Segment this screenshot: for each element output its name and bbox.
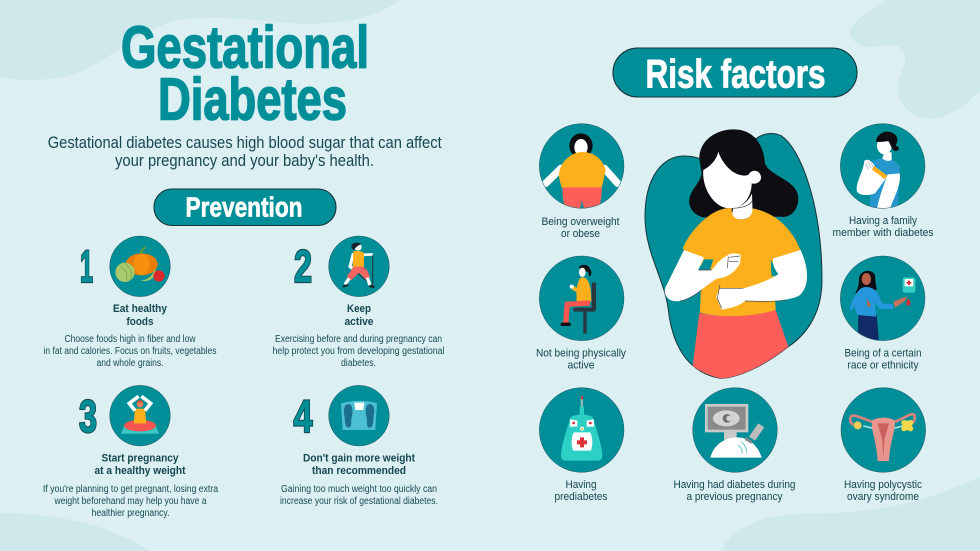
intro text: your pregnancy and your baby's health. bbox=[115, 152, 374, 170]
label: member with diabetes bbox=[832, 227, 934, 239]
heading bbox=[94, 452, 186, 477]
icon: glucose device bbox=[539, 388, 624, 472]
number 3: 3 bbox=[79, 391, 97, 442]
heading: risk factors: Risk factors bbox=[646, 52, 826, 96]
body text: in fat and calories. Focus on fruits, vegetables bbox=[44, 346, 217, 357]
label: Being overweight bbox=[542, 216, 620, 228]
label: Having a family bbox=[849, 215, 917, 227]
heading: Keep bbox=[347, 303, 371, 315]
number 1 bbox=[80, 241, 93, 292]
title bbox=[121, 14, 369, 132]
number 3: 3 bbox=[79, 391, 97, 442]
body text bbox=[43, 484, 218, 519]
body text bbox=[272, 334, 444, 369]
label: prediabetes bbox=[554, 491, 608, 503]
body text: increase your risk of gestational diabetes. bbox=[280, 496, 438, 507]
label: active bbox=[568, 360, 594, 372]
illustration: woman holding her stomach bbox=[645, 129, 822, 378]
body text: Gaining too much weight too quickly can bbox=[281, 484, 437, 495]
number 1: 1 bbox=[80, 241, 93, 292]
number 4: 4 bbox=[294, 391, 312, 442]
number 1: 1 bbox=[80, 241, 93, 292]
body text: help protect you from developing gestational bbox=[272, 346, 444, 357]
icon: weighing scale bbox=[329, 385, 389, 446]
label bbox=[832, 215, 934, 239]
icon: yoga pose bbox=[110, 385, 170, 446]
label bbox=[542, 216, 620, 240]
intro text: Gestational diabetes causes high blood sugar that can affect bbox=[48, 134, 442, 152]
icon: vegetables bbox=[110, 236, 170, 297]
body text: and whole grains. bbox=[96, 358, 164, 369]
icon: overweight woman bbox=[539, 124, 624, 210]
label bbox=[674, 479, 796, 503]
intro text bbox=[48, 134, 442, 170]
label: Having bbox=[566, 479, 596, 491]
panel: eat healthy foods bbox=[44, 236, 217, 369]
title: Diabetes bbox=[158, 66, 347, 132]
risk: prediabetes bbox=[539, 388, 624, 503]
icon: uterus and ovaries bbox=[841, 388, 926, 472]
heading: prevention: Prevention bbox=[186, 192, 302, 222]
risk: previous gestational diabetes bbox=[674, 388, 796, 503]
label: Being of a certain bbox=[844, 348, 922, 360]
body text: healthier pregnancy. bbox=[92, 508, 170, 519]
risk: overweight bbox=[539, 124, 624, 240]
heading bbox=[303, 452, 415, 477]
label: a previous pregnancy bbox=[686, 491, 783, 503]
heading: Eat healthy bbox=[113, 303, 168, 315]
heading: Don't gain more weight bbox=[303, 452, 415, 464]
heading bbox=[344, 303, 374, 328]
panel: start at a healthy weight bbox=[43, 385, 218, 519]
icon: ultrasound bbox=[693, 388, 777, 472]
heading: at a healthy weight bbox=[94, 465, 186, 477]
heading: prevention bbox=[154, 189, 336, 226]
icon: seated woman bbox=[539, 256, 624, 341]
heading bbox=[113, 303, 168, 328]
body text: diabetes. bbox=[341, 358, 376, 369]
heading: foods bbox=[126, 316, 154, 328]
risk: family member with diabetes bbox=[832, 124, 934, 239]
icon: walking woman bbox=[329, 236, 389, 297]
label bbox=[844, 479, 922, 503]
body text: weight beforehand may help you have a bbox=[54, 496, 207, 507]
body text: Exercising before and during pregnancy can bbox=[275, 334, 442, 345]
body text: If you're planning to get pregnant, losing extra bbox=[43, 484, 218, 495]
heading: Start pregnancy bbox=[102, 452, 179, 464]
label: ovary syndrome bbox=[847, 491, 919, 503]
number 4: 4 bbox=[294, 391, 312, 442]
risk: race or ethnicity bbox=[840, 256, 925, 372]
title: Gestational bbox=[121, 14, 369, 80]
number 2: 2 bbox=[294, 241, 312, 292]
panel: don't gain more weight bbox=[280, 385, 438, 507]
icon: woman with bandaged arm bbox=[840, 124, 925, 209]
label: Having had diabetes during bbox=[674, 479, 796, 491]
label: Having polycystic bbox=[844, 479, 922, 491]
body text bbox=[280, 484, 438, 507]
number 2: 2 bbox=[294, 241, 312, 292]
risk: polycystic ovary syndrome bbox=[841, 388, 926, 503]
body text: Choose foods high in fiber and low bbox=[64, 334, 196, 345]
label bbox=[536, 348, 626, 372]
body text bbox=[44, 334, 217, 369]
panel: keep active bbox=[272, 236, 444, 369]
icon: woman with glucose meter bbox=[840, 256, 925, 342]
heading: active bbox=[344, 316, 374, 328]
label: Not being physically bbox=[536, 348, 626, 360]
risk: physically inactive bbox=[536, 256, 626, 372]
label bbox=[554, 479, 608, 503]
label: race or ethnicity bbox=[848, 360, 919, 372]
heading: than recommended bbox=[312, 465, 406, 477]
label: or obese bbox=[561, 228, 600, 240]
label bbox=[844, 348, 922, 372]
